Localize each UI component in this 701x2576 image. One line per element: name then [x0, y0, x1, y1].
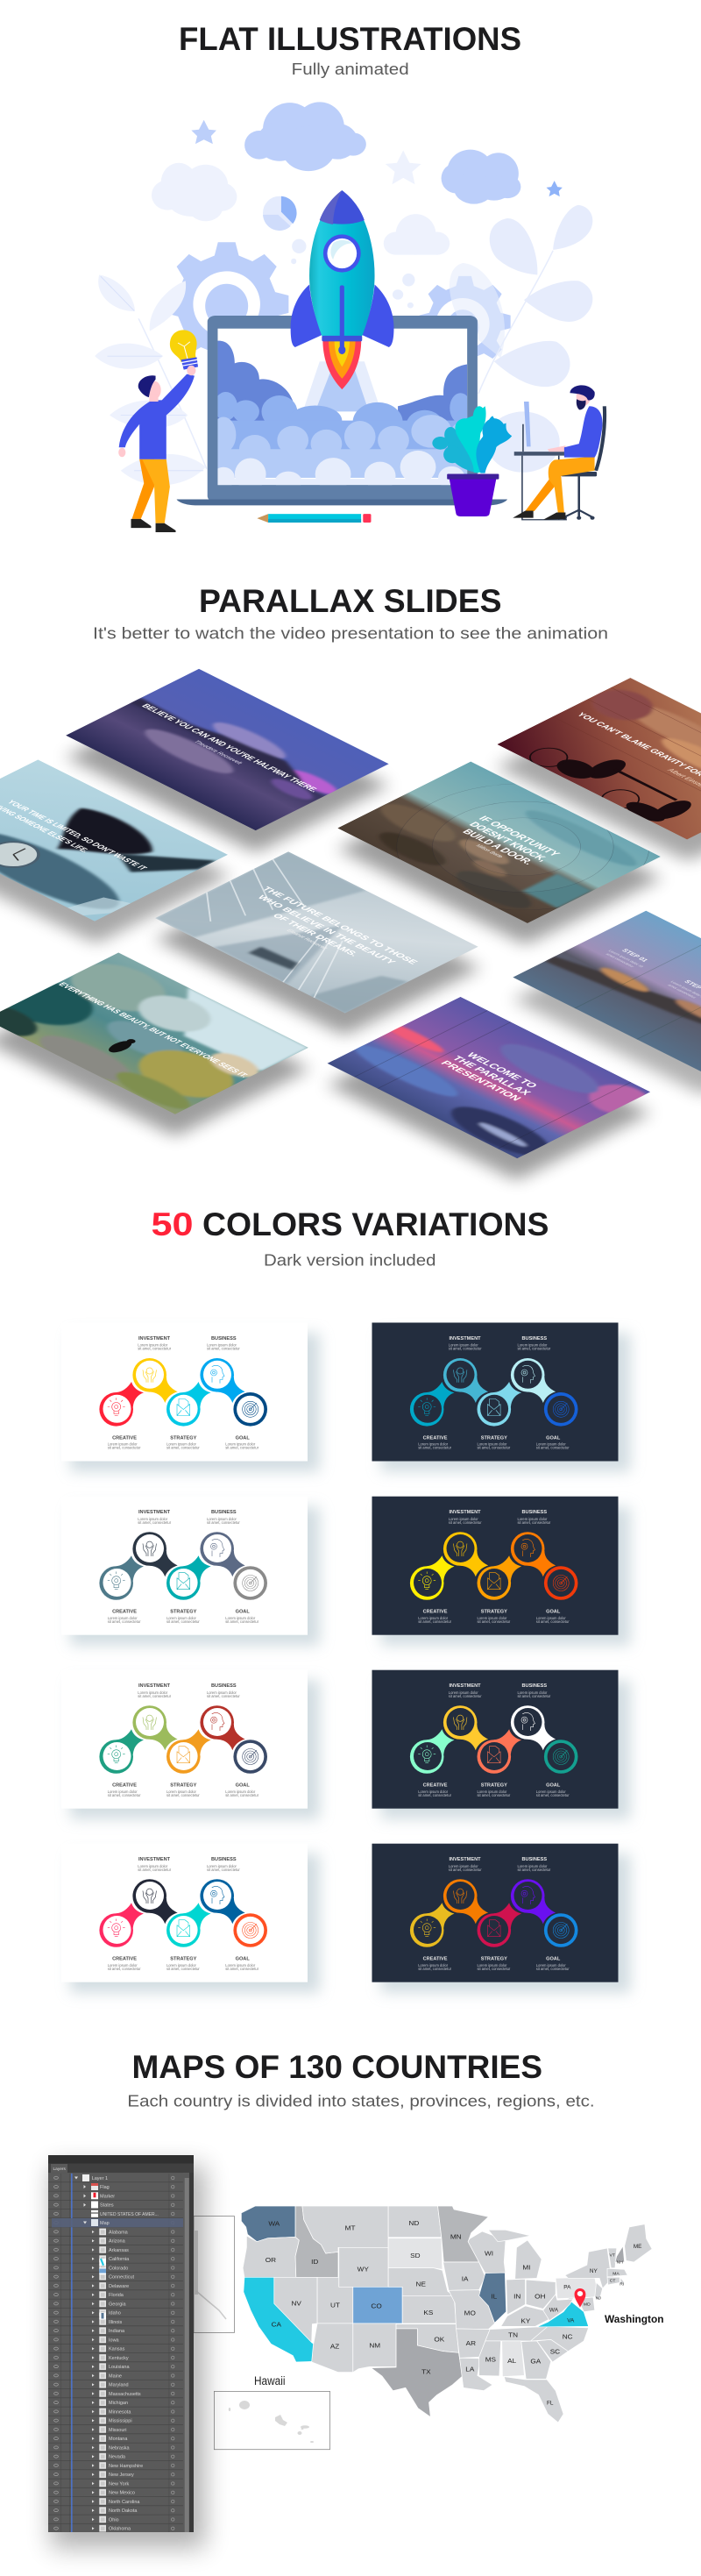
- heading: maps of 130 countries: [127, 2049, 595, 2110]
- state labels: MI: [522, 2264, 530, 2272]
- state labels: ME: [634, 2244, 641, 2250]
- card: light version green red: sit amet, consectetur: [108, 1793, 141, 1797]
- slide: mountain lake: [0, 943, 312, 1136]
- layer names: Arizona: [109, 2239, 126, 2245]
- card: light version red yellow: sit amet, consectetur: [138, 1347, 172, 1351]
- state labels: RI: [620, 2282, 624, 2288]
- state labels: VT: [610, 2253, 615, 2259]
- state labels: TN: [508, 2331, 518, 2339]
- layers tab: Layers: [53, 2167, 66, 2172]
- layer names: Louisiana: [109, 2365, 130, 2370]
- card: light version pink teal: Lorem ipsum dolor: [108, 1963, 138, 1968]
- state labels: SD: [410, 2252, 421, 2259]
- card: light version pink teal: sit amet, consectetur: [138, 1868, 172, 1872]
- illustration: rocket launching from laptop: [95, 102, 605, 532]
- layer names: Marker: [100, 2194, 115, 2199]
- layer names: Missouri: [109, 2428, 126, 2433]
- card: light version red yellow: Lorem ipsum dolor: [108, 1442, 138, 1447]
- card: light version green red: Lorem ipsum dolor: [138, 1690, 168, 1695]
- card: dark version blue: Lorem ipsum dolor: [477, 1442, 507, 1447]
- card: light version red yellow: [61, 1322, 320, 1471]
- gears: [165, 242, 511, 367]
- card: dark version blue: Lorem ipsum dolor: [517, 1343, 548, 1348]
- slide: city with door arcs: [334, 761, 665, 952]
- state labels: KY: [520, 2317, 531, 2324]
- state labels: NC: [563, 2333, 573, 2340]
- layers tab: [51, 2164, 67, 2173]
- icon: pencil: [257, 514, 371, 523]
- map: united states: [241, 2206, 652, 2423]
- laptop screen smoke clouds: [211, 341, 472, 491]
- state labels: LA: [465, 2366, 475, 2373]
- state labels: MS: [485, 2356, 496, 2364]
- layer names: New York: [109, 2481, 129, 2487]
- card: light version red yellow: sit amet, consectetur: [166, 1446, 200, 1450]
- state labels: IN: [513, 2293, 521, 2301]
- card: dark version blue: BUSINESS: [521, 1336, 547, 1341]
- card: dark version gold violet: CREATIVE: [423, 1956, 448, 1961]
- state labels: WA: [268, 2220, 280, 2228]
- slide: welcome sunset: THE PARALLAX: [450, 1055, 533, 1097]
- state labels: NV: [291, 2300, 302, 2307]
- card: light version pink teal: Lorem ipsum dolor: [138, 1864, 168, 1868]
- card: light version red yellow: sit amet, consectetur: [108, 1446, 141, 1450]
- card: dark version gold violet: sit amet, consectetur: [418, 1967, 452, 1971]
- slide: welcome sunset: WELCOME TO: [464, 1051, 539, 1090]
- slide: glass buildings: WHO BELIEVE IN THE BEAUTY: [255, 894, 398, 965]
- slide: glass buildings: THE FUTURE BELONGS TO THOSE: [259, 886, 420, 966]
- slide: steps skyline: amet consectetur: [605, 952, 636, 968]
- layer names: Kansas: [109, 2346, 125, 2352]
- state labels: CA: [272, 2321, 282, 2328]
- card: dark version gold violet: Lorem ipsum dolor: [418, 1963, 449, 1968]
- card: dark version gold violet: sit amet, consectetur: [477, 1967, 511, 1971]
- state labels: NH: [617, 2259, 623, 2265]
- card: dark version mint coral: Lorem ipsum dolor: [418, 1790, 449, 1794]
- card: light version green red: GOAL: [236, 1783, 250, 1788]
- state labels: TX: [421, 2368, 431, 2375]
- state labels: SC: [550, 2348, 560, 2355]
- slide: mountain lake: EVERYTHING HAS BEAUTY, BUT NOT EVERYONE SEES IT.: [57, 981, 251, 1078]
- card: light version red yellow: CREATIVE: [112, 1435, 137, 1441]
- panel: isometric parallax slides: [0, 669, 701, 1180]
- card: light version pink teal: sit amet, consectetur: [225, 1967, 259, 1971]
- card: dark version mint coral: Lorem ipsum dolor: [536, 1790, 566, 1794]
- slide: welcome sunset: [312, 989, 666, 1180]
- layer names: UNITED STATES OF AMER...: [100, 2212, 159, 2217]
- card: light version pink teal: CREATIVE: [112, 1956, 137, 1961]
- state labels: NJ: [596, 2296, 601, 2302]
- card: light version green red: Lorem ipsum dolor: [108, 1790, 138, 1794]
- slide: city with door arcs: BUILD A DOOR.: [460, 828, 536, 866]
- state labels: GA: [530, 2358, 542, 2366]
- card: light version green red: sit amet, consectetur: [207, 1694, 240, 1698]
- card: light version green red: sit amet, consectetur: [166, 1793, 200, 1797]
- state labels: ID: [311, 2258, 319, 2266]
- card: light version slate: [61, 1497, 320, 1646]
- layer names: Illinois: [109, 2320, 123, 2325]
- layer names: Florida: [109, 2293, 124, 2298]
- card: dark version gold violet: GOAL: [546, 1956, 561, 1961]
- card: dark version gold violet: Lorem ipsum dolor: [536, 1963, 566, 1968]
- slide: cyclists at sunset: [491, 678, 701, 861]
- card: dark version mint coral: STRATEGY: [481, 1783, 507, 1788]
- card: dark version blue: Lorem ipsum dolor: [536, 1442, 566, 1447]
- slide: purple lake: Theodore Roosevelt: [193, 740, 244, 765]
- state labels: WI: [485, 2250, 493, 2258]
- card: light version slate: sit amet, consectetur: [207, 1520, 240, 1525]
- card: dark version gold violet: BUSINESS: [521, 1857, 547, 1862]
- state labels: AL: [507, 2357, 517, 2365]
- layer names: Michigan: [109, 2401, 128, 2406]
- card: light version pink teal: sit amet, consectetur: [108, 1967, 141, 1971]
- slide: purple lake: [66, 669, 393, 853]
- layer names: Connecticut: [109, 2274, 135, 2280]
- card: dark version yellow orange: GOAL: [546, 1609, 561, 1614]
- card: light version green red: sit amet, consectetur: [225, 1793, 259, 1797]
- clouds and stars background: [152, 102, 563, 308]
- card: dark version yellow orange: INVESTMENT: [449, 1510, 481, 1515]
- heading: colors variations: [151, 1206, 549, 1270]
- plant leaves right: [450, 205, 592, 473]
- layer names: Mississippi: [109, 2418, 132, 2423]
- icon: potted plant: [432, 406, 512, 516]
- layer names: North Dakota: [109, 2508, 138, 2514]
- layer names: Nebraska: [109, 2445, 130, 2451]
- heading: maps of 130 countries: MAPS OF 130 COUNTRIES: [131, 2049, 542, 2085]
- card: dark version mint coral: BUSINESS: [521, 1683, 547, 1689]
- washington label: Washington: [605, 2313, 664, 2325]
- heading: colors variations: COLORS VARIATIONS: [202, 1206, 549, 1242]
- icon: pie chart: [263, 196, 297, 231]
- card: dark version blue: Lorem ipsum dolor: [418, 1442, 449, 1447]
- icon: rocket: [291, 190, 393, 389]
- layer names: Ohio: [109, 2517, 119, 2523]
- state labels: [266, 2219, 641, 2406]
- icon: map pin: [575, 2288, 585, 2308]
- heading: flat illustrations: FLAT ILLUSTRATIONS: [179, 21, 521, 57]
- layer names: North Carolina: [109, 2500, 140, 2505]
- slide: city with door arcs: Milton Berle: [474, 844, 504, 859]
- layer names: New Jersey: [109, 2473, 134, 2478]
- card: light version red yellow: GOAL: [236, 1435, 250, 1441]
- slide: glass buildings: [155, 851, 480, 1035]
- card: dark version yellow orange: Lorem ipsum dolor: [449, 1517, 478, 1521]
- slide: woman with clock: YOUR TIME IS LIMITED, SO DON'T WASTE IT: [5, 799, 150, 872]
- card: dark version blue: sit amet, consectetur: [449, 1347, 482, 1351]
- card: dark version mint coral: sit amet, consectetur: [449, 1694, 482, 1698]
- state labels: VA: [567, 2318, 575, 2324]
- layer names: Minnesota: [109, 2409, 131, 2415]
- layer names: California: [109, 2257, 130, 2262]
- card: dark version yellow orange: Lorem ipsum dolor: [536, 1616, 566, 1620]
- layer names: Arkansas: [109, 2248, 129, 2253]
- card: dark version yellow orange: Lorem ipsum dolor: [477, 1616, 507, 1620]
- state labels: MN: [450, 2233, 462, 2241]
- card: dark version yellow orange: Lorem ipsum dolor: [517, 1517, 548, 1521]
- card: light version red yellow: INVESTMENT: [138, 1336, 171, 1341]
- card: dark version mint coral: sit amet, consectetur: [477, 1793, 511, 1797]
- card: dark version mint coral: GOAL: [546, 1783, 561, 1788]
- state labels: NM: [369, 2342, 380, 2350]
- card: light version red yellow: sit amet, consectetur: [225, 1446, 259, 1450]
- state labels: AR: [466, 2339, 476, 2347]
- state labels: WA: [549, 2308, 559, 2314]
- layer names: Georgia: [109, 2302, 127, 2307]
- state labels: IA: [462, 2275, 469, 2282]
- card: light version slate: sit amet, consectetur: [225, 1619, 259, 1624]
- card: dark version blue: sit amet, consectetur: [418, 1446, 452, 1450]
- slide: steps skyline: [513, 911, 701, 1095]
- hawaii inset: [214, 2374, 329, 2450]
- layer names: Montana: [109, 2437, 128, 2442]
- panel: layers shadow and frame: [48, 2155, 205, 2548]
- slide: purple lake: BELIEVE YOU CAN AND YOU'RE HALFWAY THERE.: [139, 703, 321, 793]
- card: light version slate: sit amet, consectetur: [166, 1619, 200, 1624]
- state labels: MO: [464, 2309, 476, 2317]
- card: light version red yellow: sit amet, consectetur: [207, 1347, 240, 1351]
- card: dark version mint coral: INVESTMENT: [449, 1683, 481, 1689]
- card: light version red yellow: Lorem ipsum dolor: [138, 1343, 168, 1348]
- card: light version pink teal: INVESTMENT: [138, 1857, 171, 1862]
- slide: steps skyline: STEP 01: [620, 948, 650, 963]
- card: dark version yellow orange: STRATEGY: [481, 1609, 507, 1614]
- layer names: Idaho: [109, 2311, 121, 2316]
- state labels: IL: [491, 2293, 498, 2301]
- heading: flat illustrations: [179, 21, 521, 78]
- state labels: NY: [590, 2268, 598, 2274]
- layer names: Alabama: [109, 2230, 129, 2235]
- card: dark version yellow orange: BUSINESS: [521, 1510, 547, 1515]
- card: light version green red: Lorem ipsum dolor: [225, 1790, 256, 1794]
- card: dark version yellow orange: sit amet, consectetur: [536, 1619, 570, 1624]
- slide: glass buildings: OF THEIR DREAMS.: [270, 913, 360, 957]
- card: dark version gold violet: sit amet, consectetur: [449, 1868, 482, 1872]
- layer names: Oklahoma: [109, 2527, 131, 2532]
- card: dark version yellow orange: sit amet, consectetur: [517, 1520, 551, 1525]
- card: light version slate: sit amet, consectetur: [138, 1520, 172, 1525]
- card: dark version gold violet: Lorem ipsum dolor: [477, 1963, 507, 1968]
- card: light version slate: GOAL: [236, 1609, 250, 1614]
- card: light version slate: BUSINESS: [211, 1510, 237, 1515]
- state labels: UT: [330, 2302, 340, 2309]
- state labels: MA: [612, 2272, 620, 2277]
- card: light version green red: STRATEGY: [170, 1783, 197, 1788]
- slide: steps skyline: Lorem ipsum dolor sit: [607, 950, 645, 968]
- layer names: Maine: [109, 2373, 122, 2379]
- state labels: FL: [547, 2400, 554, 2406]
- layer names: Layer 1: [92, 2176, 108, 2181]
- heading: parallax slides: PARALLAX SLIDES: [199, 583, 501, 619]
- laptop: [177, 316, 507, 505]
- state shapes: [241, 2206, 652, 2423]
- heading: flat illustrations: Fully animated: [292, 60, 409, 78]
- card: light version slate: Lorem ipsum dolor: [225, 1616, 256, 1620]
- card: dark version mint coral: sit amet, consectetur: [517, 1694, 551, 1698]
- icon: light bulb: [170, 330, 198, 370]
- state labels: NE: [416, 2281, 426, 2288]
- card: light version green red: sit amet, consectetur: [138, 1694, 172, 1698]
- state labels: OH: [535, 2293, 546, 2301]
- card: light version pink teal: GOAL: [236, 1956, 250, 1961]
- card: dark version blue: Lorem ipsum dolor: [449, 1343, 478, 1348]
- card: light version red yellow: Lorem ipsum dolor: [225, 1442, 256, 1447]
- layer names: Colorado: [109, 2266, 128, 2271]
- layer names: Massachusetts: [109, 2392, 141, 2397]
- heading: parallax slides: It's better to watch the video presentation to see the animation: [93, 623, 608, 642]
- card: dark version gold violet: sit amet, consectetur: [536, 1967, 570, 1971]
- card: light version green red: INVESTMENT: [138, 1683, 171, 1689]
- card: dark version blue: sit amet, consectetur: [477, 1446, 511, 1450]
- layer names: Maryland: [109, 2383, 129, 2388]
- card: light version red yellow: Lorem ipsum dolor: [207, 1343, 237, 1348]
- heading: maps of 130 countries: Each country is divided into states, provinces, regions, etc.: [127, 2092, 595, 2110]
- card: light version pink teal: BUSINESS: [211, 1857, 237, 1862]
- card: light version red yellow: STRATEGY: [170, 1435, 197, 1441]
- card: dark version mint coral: Lorem ipsum dolor: [517, 1690, 548, 1695]
- card: dark version mint coral: Lorem ipsum dolor: [449, 1690, 478, 1695]
- layer names: Nevada: [109, 2455, 126, 2460]
- card: dark version gold violet: Lorem ipsum dolor: [517, 1864, 548, 1868]
- card: dark version yellow orange: CREATIVE: [423, 1609, 448, 1614]
- card: light version pink teal: STRATEGY: [170, 1956, 197, 1961]
- state labels: MD: [584, 2302, 591, 2308]
- heading: colors variations: Dark version included: [264, 1251, 436, 1270]
- card: dark version gold violet: sit amet, consectetur: [517, 1868, 551, 1872]
- layer names: Flag: [100, 2185, 110, 2190]
- heading: colors variations: 50: [151, 1206, 193, 1242]
- card: light version slate: STRATEGY: [170, 1609, 197, 1614]
- heading: parallax slides: [93, 583, 608, 642]
- state labels: WY: [358, 2266, 370, 2274]
- card: dark version blue: CREATIVE: [423, 1435, 448, 1441]
- layer names: Indiana: [109, 2329, 125, 2334]
- state labels: AZ: [330, 2343, 339, 2351]
- card: light version pink teal: [61, 1844, 320, 1993]
- slide: city with door arcs: DOESN'T KNOCK,: [466, 821, 551, 863]
- card: light version red yellow: Lorem ipsum dolor: [166, 1442, 197, 1447]
- card: light version green red: Lorem ipsum dolor: [207, 1690, 237, 1695]
- card: light version green red: Lorem ipsum dolor: [166, 1790, 197, 1794]
- card: light version pink teal: Lorem ipsum dolor: [166, 1963, 197, 1968]
- layer names: New Hampshire: [109, 2464, 143, 2469]
- layer names: Map: [100, 2221, 110, 2226]
- card: dark version blue: GOAL: [546, 1435, 561, 1441]
- card: light version slate: CREATIVE: [112, 1609, 137, 1614]
- layer names: Iowa: [109, 2338, 120, 2343]
- card: dark version gold violet: Lorem ipsum dolor: [449, 1864, 478, 1868]
- card: light version red yellow: BUSINESS: [211, 1336, 237, 1341]
- card: dark version blue: STRATEGY: [481, 1435, 507, 1441]
- card: dark version yellow orange: sit amet, consectetur: [418, 1619, 452, 1624]
- character: man holding bulb: [118, 366, 195, 532]
- state labels: MT: [345, 2224, 356, 2231]
- character: man at desk: [513, 385, 605, 520]
- card: dark version blue: INVESTMENT: [449, 1336, 481, 1341]
- state labels: CT: [610, 2278, 615, 2283]
- slide: steps skyline: amet consectetur: [667, 984, 697, 1000]
- card: light version pink teal: sit amet, consectetur: [207, 1868, 240, 1872]
- card: light version pink teal: Lorem ipsum dolor: [225, 1963, 256, 1968]
- card: dark version gold violet: [372, 1844, 631, 1993]
- slide: city with door arcs: IF OPPORTUNITY: [476, 815, 563, 857]
- card: dark version yellow orange: sit amet, consectetur: [449, 1520, 482, 1525]
- card: light version pink teal: Lorem ipsum dolor: [207, 1864, 237, 1868]
- card: dark version yellow orange: Lorem ipsum dolor: [418, 1616, 449, 1620]
- card: dark version yellow orange: sit amet, consectetur: [477, 1619, 511, 1624]
- state labels: OR: [266, 2256, 276, 2264]
- card: light version green red: BUSINESS: [211, 1683, 237, 1689]
- state labels: KS: [423, 2309, 433, 2316]
- card: light version slate: Lorem ipsum dolor: [207, 1517, 237, 1521]
- card: dark version mint coral: Lorem ipsum dolor: [477, 1790, 507, 1794]
- card: light version slate: INVESTMENT: [138, 1510, 171, 1515]
- layer names: [92, 2176, 159, 2532]
- plant leaves left: [95, 274, 207, 485]
- state labels: PA: [563, 2285, 571, 2291]
- card: dark version yellow orange: [372, 1497, 631, 1646]
- card: dark version mint coral: CREATIVE: [423, 1783, 448, 1788]
- card: dark version gold violet: INVESTMENT: [449, 1857, 481, 1862]
- layer names: States: [100, 2202, 114, 2208]
- card: light version slate: sit amet, consectetur: [108, 1619, 141, 1624]
- card: dark version gold violet: STRATEGY: [481, 1956, 507, 1961]
- card: light version slate: Lorem ipsum dolor: [166, 1616, 197, 1620]
- layer names: New Mexico: [109, 2490, 135, 2495]
- state labels: CO: [371, 2302, 382, 2310]
- card: light version pink teal: sit amet, consectetur: [166, 1967, 200, 1971]
- card: dark version mint coral: sit amet, consectetur: [536, 1793, 570, 1797]
- card: dark version mint coral: [372, 1670, 631, 1819]
- hawaii inset: Hawaii: [254, 2374, 286, 2387]
- card: light version slate: Lorem ipsum dolor: [108, 1616, 138, 1620]
- card: dark version blue: [372, 1322, 631, 1471]
- slide: glass buildings: Eleanor Roosevelt: [285, 929, 328, 950]
- card: dark version blue: sit amet, consectetur: [517, 1347, 551, 1351]
- card: light version green red: [61, 1670, 320, 1819]
- card: light version slate: Lorem ipsum dolor: [138, 1517, 168, 1521]
- card: dark version mint coral: sit amet, consectetur: [418, 1793, 452, 1797]
- state labels: OK: [434, 2336, 445, 2343]
- layer rows: [48, 2173, 194, 2532]
- layer names: Kentucky: [109, 2356, 129, 2361]
- card: light version green red: CREATIVE: [112, 1783, 137, 1788]
- slide: welcome sunset: PRESENTATION: [438, 1060, 523, 1102]
- card: dark version blue: sit amet, consectetur: [536, 1446, 570, 1450]
- state labels: ND: [408, 2219, 420, 2227]
- slide: woman with clock: [0, 759, 230, 943]
- alaska inset: [194, 2217, 234, 2332]
- layer names: Delaware: [109, 2284, 129, 2289]
